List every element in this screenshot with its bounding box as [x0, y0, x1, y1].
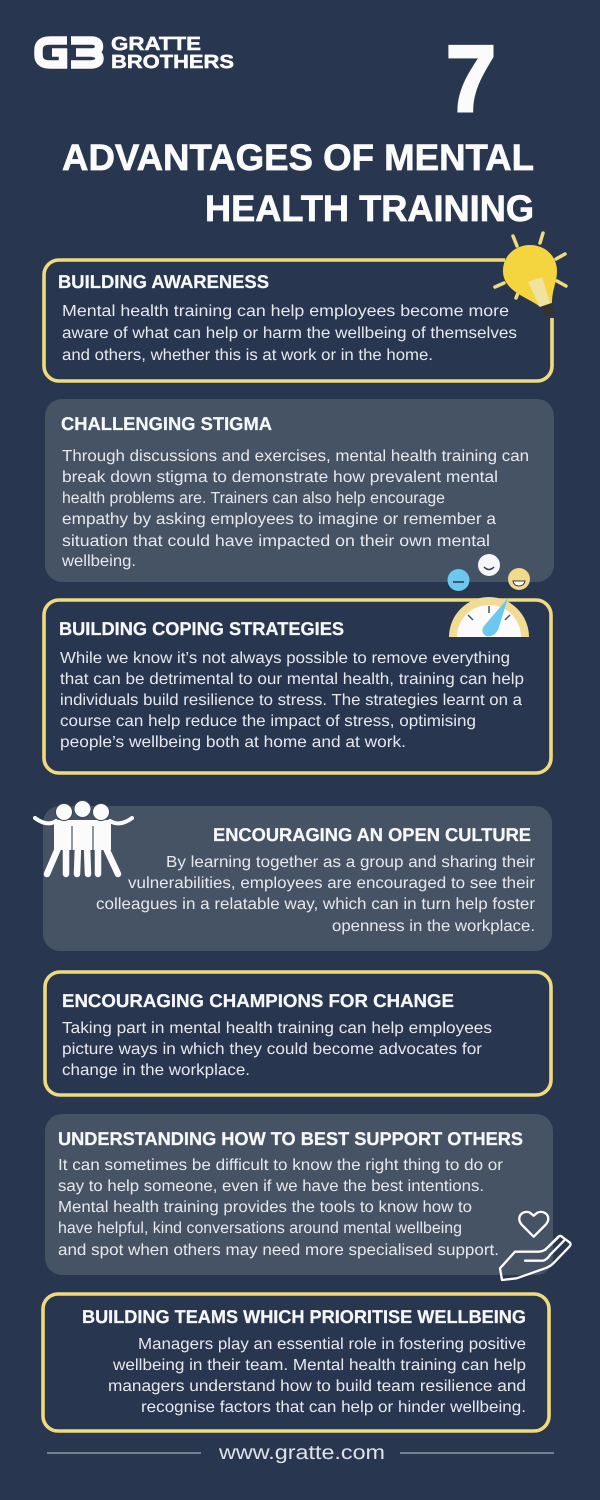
icon: laughing face: [508, 568, 530, 590]
body text: While we know it’s not always possible to remove everything: [60, 650, 510, 667]
body text: Managers play an essential role in fostering positive: [138, 1336, 526, 1353]
heading: ENCOURAGING AN OPEN CULTURE: [213, 824, 531, 845]
body text: situation that could have impacted on their own mental: [62, 533, 490, 550]
body text: course can help reduce the impact of stress, optimising: [60, 713, 476, 730]
heading: BUILDING TEAMS WHICH PRIORITISE WELLBEING: [82, 1306, 526, 1327]
title: [62, 137, 534, 229]
icon: happy face: [478, 554, 500, 576]
footer: website: www.gratte.com: [218, 1442, 385, 1464]
heading: BUILDING AWARENESS: [58, 271, 269, 292]
heading: BUILDING COPING STRATEGIES: [59, 618, 344, 639]
body text: [58, 1157, 504, 1259]
body text: wellbeing.: [61, 553, 136, 570]
body text: health problems are. Trainers can also help encourage: [62, 490, 445, 507]
body text: recognise factors that can help or hinder wellbeing.: [141, 1399, 526, 1416]
body text: [62, 1020, 492, 1079]
body text: Taking part in mental health training can help employees: [62, 1020, 492, 1037]
body text: [62, 303, 517, 364]
panel: encouraging champions for change: [45, 972, 551, 1095]
body text: openness in the workplace.: [332, 918, 535, 935]
logo wordmark: [111, 34, 234, 73]
body text: and others, whether this is at work or in the home.: [62, 347, 433, 364]
body text: Mental health training provides the tools to know how to: [58, 1199, 472, 1216]
body text: and spot when others may need more specialised support.: [58, 1242, 499, 1259]
body text: [108, 1336, 526, 1416]
panel: building awareness: [44, 256, 556, 381]
body text: empathy by asking employees to imagine or remember a: [62, 511, 496, 528]
body text: [96, 854, 536, 935]
body text: aware of what can help or harm the wellbeing of themselves: [62, 325, 517, 342]
panel: building coping strategies: [44, 600, 551, 773]
body text: It can sometimes be difficult to know the right thing to do or: [58, 1157, 504, 1174]
body text: have helpful, kind conversations around mental wellbeing: [58, 1220, 462, 1237]
logo mark: [38, 40, 100, 64]
title: ADVANTAGES OF MENTAL: [62, 137, 534, 178]
body text: change in the workplace.: [62, 1062, 250, 1079]
panel: encouraging an open culture: [43, 806, 552, 951]
panel: understanding how to best support others: [45, 1114, 553, 1275]
panel: building teams which prioritise wellbeing: [43, 1294, 549, 1431]
icon: mood gauge: [448, 554, 530, 637]
icon: light bulb: [495, 233, 566, 317]
icon: group of people: [35, 800, 132, 878]
body text: people’s wellbeing both at home and at work.: [60, 734, 406, 751]
body text: say to help someone, even if we have the best intentions.: [58, 1178, 484, 1195]
title: HEALTH TRAINING: [205, 188, 534, 229]
icon: sad face: [448, 569, 470, 591]
body text: that can be detrimental to our mental health, training can help: [60, 671, 524, 688]
heading: UNDERSTANDING HOW TO BEST SUPPORT OTHERS: [58, 1128, 523, 1149]
body text: individuals build resilience to stress. The strategies learnt on a: [60, 692, 522, 709]
logo wordmark: BROTHERS: [111, 52, 234, 73]
logo wordmark: GRATTE: [111, 34, 201, 55]
icon: hand holding heart: [500, 1212, 571, 1280]
panel: challenging stigma: [45, 399, 554, 582]
logo: Gratte Brothers: [38, 34, 234, 73]
body text: colleagues in a relatable way, which can in turn help foster: [96, 896, 536, 913]
body text: vulnerabilities, employees are encouraged to see their: [128, 875, 536, 892]
body text: By learning together as a group and sharing their: [166, 854, 536, 871]
body text: Mental health training can help employees become more: [62, 303, 509, 320]
body text: [61, 448, 529, 570]
title number: 7: [446, 26, 496, 131]
heading: CHALLENGING STIGMA: [61, 413, 272, 434]
body text: wellbeing in their team. Mental health training can help: [112, 1357, 526, 1374]
body text: break down stigma to demonstrate how prevalent mental: [62, 469, 498, 486]
body text: managers understand how to build team resilience and: [108, 1378, 526, 1395]
body text: [60, 650, 524, 751]
body text: picture ways in which they could become advocates for: [62, 1041, 483, 1058]
heading: ENCOURAGING CHAMPIONS FOR CHANGE: [62, 990, 454, 1011]
body text: Through discussions and exercises, mental health training can: [62, 448, 529, 465]
